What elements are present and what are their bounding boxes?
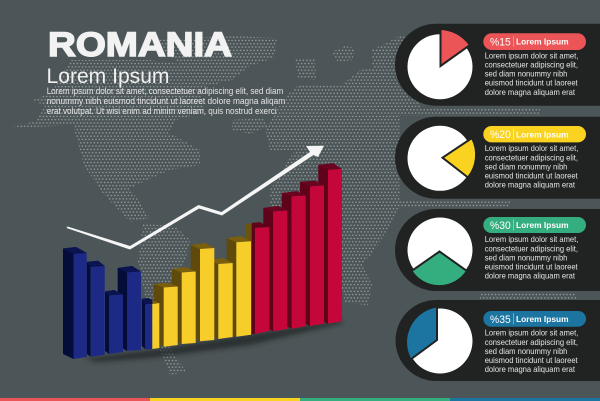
text: panel 4 — [485, 328, 578, 374]
badge: 15 percent: %15 — [490, 37, 511, 49]
panel: 20 percent — [395, 117, 600, 199]
badge: 20 percent: %20 — [490, 129, 511, 141]
text: panel 2 — [485, 143, 578, 190]
badge: 35 percent: %35 — [490, 314, 511, 326]
text: panel 3: sed diam nonummy nibh — [485, 252, 568, 262]
title: ROMANIA — [48, 26, 232, 64]
badge: 35 percent: Lorem Ipsum — [516, 314, 569, 324]
text: panel 2: sed diam nonummy nibh — [485, 161, 568, 171]
intro paragraph: erat volutpat. Ut wisi enim ad minim veniam, quis nostrud exerci — [47, 106, 277, 116]
text: panel 2: dolore magna aliquam erat — [485, 180, 576, 190]
text: panel 1: Lorem ipsum dolor sit amet, — [485, 50, 578, 60]
intro paragraph — [47, 86, 285, 116]
text: panel 3: dolore magna aliquam erat — [485, 270, 576, 280]
pie chart: 30 percent — [408, 218, 472, 286]
badge: 15 percent — [483, 33, 586, 50]
text: panel 1: consectetuer adipiscing elit, — [485, 60, 578, 70]
text: panel 1: euismod tincidunt ut laoreet — [485, 78, 578, 88]
badge: 20 percent: Lorem Ipsum — [516, 129, 569, 139]
text: panel 1: dolore magna aliquam erat — [485, 87, 576, 97]
pie chart: 20 percent — [408, 126, 476, 191]
text: panel 3: consectetuer adipiscing elit, — [485, 243, 578, 253]
text: panel 2: consectetuer adipiscing elit, — [485, 152, 578, 162]
pie chart: 35 percent — [406, 306, 472, 374]
text: panel 2: Lorem ipsum dolor sit amet, — [485, 143, 578, 153]
panel: 15 percent — [395, 24, 600, 106]
text: panel 3: euismod tincidunt ut laoreet — [485, 261, 578, 271]
text: panel 4: sed diam nonummy nibh — [485, 346, 568, 356]
badge: 30 percent — [483, 217, 586, 233]
bottom colour stripe — [0, 398, 600, 401]
pie chart: 15 percent — [408, 29, 472, 99]
intro paragraph: Lorem ipsum dolor sit amet, consectetuer adipiscing elit, sed diam — [47, 86, 283, 96]
text: panel 3: Lorem ipsum dolor sit amet, — [485, 234, 578, 244]
panel: 30 percent — [395, 209, 600, 291]
text: panel 4: euismod tincidunt ut laoreet — [485, 355, 578, 365]
text: panel 3 — [485, 234, 578, 280]
dotted world map — [13, 36, 576, 375]
text: panel 2: euismod tincidunt ut laoreet — [485, 170, 578, 180]
text: panel 1 — [485, 50, 578, 97]
subtitle: Lorem Ipsum — [46, 64, 170, 88]
badge: 30 percent: %30 — [490, 220, 511, 232]
bar chart shadow — [85, 320, 343, 362]
badge: 35 percent — [483, 311, 586, 327]
arrow: rising trend line — [66, 146, 324, 250]
badge: 15 percent: Lorem Ipsum — [516, 37, 569, 47]
badge: 30 percent: Lorem Ipsum — [516, 220, 569, 230]
badge: 20 percent — [483, 126, 586, 142]
text: panel 4: Lorem ipsum dolor sit amet, — [485, 328, 578, 338]
intro paragraph: nonummy nibh euismod tincidunt ut laoreet dolore magna aliqam — [47, 96, 285, 106]
text: panel 4: consectetuer adipiscing elit, — [485, 337, 578, 347]
text: panel 4: dolore magna aliquam erat — [485, 364, 576, 374]
text: panel 1: sed diam nonummy nibh — [485, 69, 568, 79]
3D bar chart in flag colours — [63, 163, 342, 359]
panel: 35 percent — [396, 300, 600, 381]
